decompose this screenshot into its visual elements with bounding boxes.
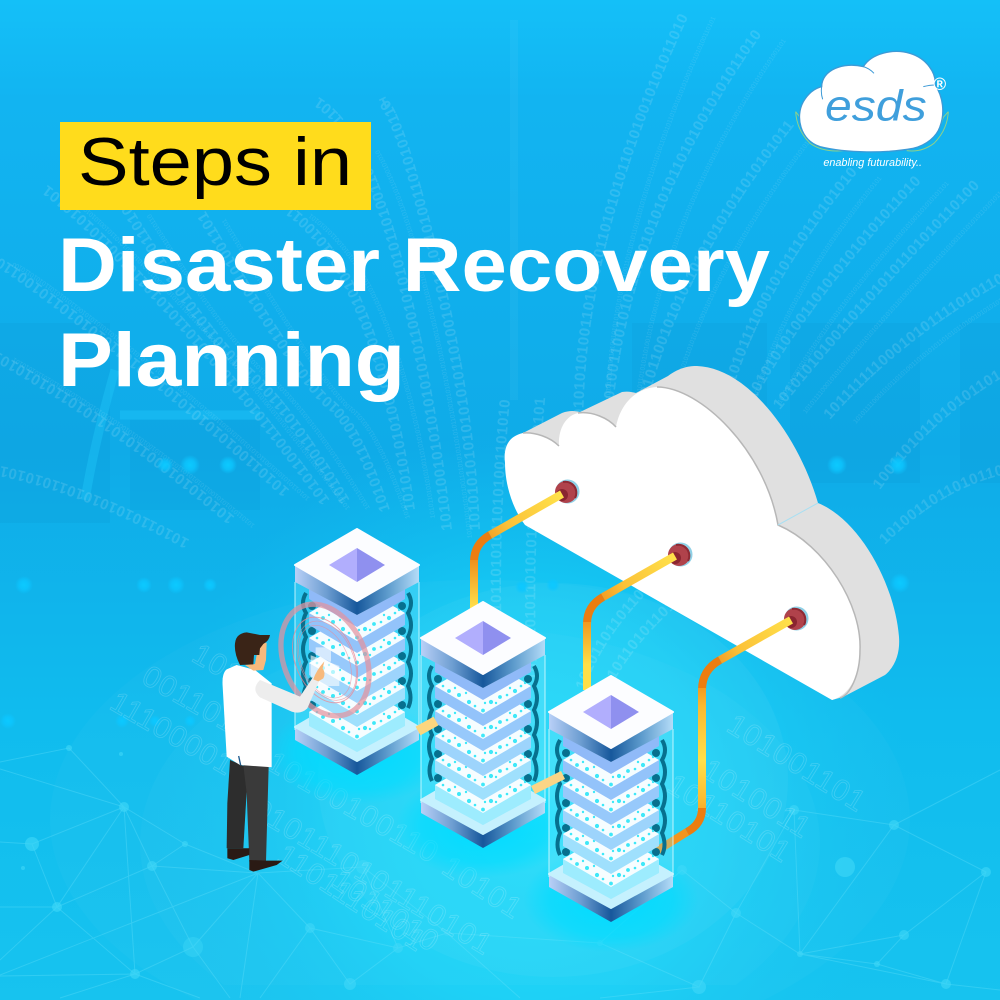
server tower 3 (523, 676, 699, 952)
cable link tower 2 to 3 (533, 775, 563, 790)
cable 3 (655, 620, 791, 852)
outlined binary digits on floor: 10100100110 (262, 745, 445, 870)
glow dots (0, 455, 910, 729)
background binary streams: 1011010110110101 (608, 605, 673, 678)
highlighted heading: Steps in (60, 122, 371, 210)
outlined binary digits on floor (104, 637, 872, 962)
background binary streams: 1010110110110101 (576, 590, 644, 687)
cloud front face (505, 387, 860, 700)
neck and face (245, 643, 267, 671)
logo inner arcs (821, 67, 935, 99)
network mesh (0, 745, 1000, 998)
outlined binary digits on floor: 10101 (436, 850, 528, 926)
coat (222, 665, 272, 767)
background binary streams: 101010101010101010110100101010101101001101010101101 (379, 96, 480, 530)
outlined binary digits on floor: 1101110101 (271, 838, 432, 959)
tagline: enabling futurability.. (823, 157, 922, 169)
title: Disaster Recovery Planning (58, 223, 770, 403)
trousers (227, 760, 247, 848)
arm (255, 677, 319, 713)
background binary streams: 1010110101010100110101010110101011010010101010010101010100110101010110101101010101001101 (13, 358, 254, 528)
background binary streams: 1010110101010100110101010110101011010010101010010101010100110101010110101101010101001101010101101010110100101010 (222, 218, 410, 518)
background binary streams: 1010110101010100110101010110101011010010101010010101010100110101010110101101010101001101010101101010110100101010 (376, 150, 472, 538)
outlined binary digits on floor: 101001101 (721, 708, 872, 819)
outlined binary digits on floor: 10110101 (661, 768, 797, 870)
background binary streams: 1010110101010100110101010110101011010010101010010101010100110101010110101101010101001101010101101010110100101010100101010101001101010101 (680, 140, 810, 369)
shoes (227, 848, 249, 860)
background binary streams: 101010010110110101011010100110101010110101 (490, 400, 510, 611)
background binary streams: 1010110101010100110101010110101011010010101010010101010100110101010110101101010101001101010101101010110100101010100101010101001101010101 (636, 40, 786, 392)
background binary streams: 101011010110101011010101001101010101101010 (524, 398, 545, 677)
cable 2 (587, 556, 675, 690)
outlined binary digits on floor: 111000010 (104, 685, 255, 791)
background binary streams: 1010111100010101101010011010101011010101101001010101010110101010011010101011010101101001010 (778, 182, 949, 404)
cable 1 (474, 494, 562, 612)
registered mark: ® (933, 74, 946, 94)
background binary streams: 1010110101010100110101010110101011010010101010010101010100110101010110101101010101001101010101101010110100101010100101010101001101010101 (606, 17, 716, 400)
background binary streams: 1010110101010100110101010110101011010010101010010101010100110101010110101101010101001101010101101010110100101010 (147, 214, 370, 510)
outlined binary digits on floor: 1011 (186, 637, 262, 700)
highlighted heading: Steps in: Steps in (78, 124, 352, 200)
logo cloud (799, 51, 943, 152)
background binary streams: 1010110101010100110101010110101011010010101010010101010100110101010110101101010101001101010101101010110100 (12, 263, 310, 500)
outlined binary digits on floor: 1010011 (696, 753, 817, 845)
hand (313, 661, 325, 681)
cloud (505, 366, 899, 700)
cable plugs (555, 480, 808, 630)
outlined binary digits on floor: 0101110101110101 (246, 793, 498, 962)
server tower 2 (395, 602, 571, 878)
cloud depth side (523, 366, 899, 700)
title: Disaster Recovery Planning: Disaster Recovery (58, 223, 770, 308)
outlined binary digits on floor: 001101 (136, 659, 243, 740)
title: Disaster Recovery Planning: Planning (58, 318, 405, 403)
logo: esds (796, 51, 948, 169)
logo hands (796, 112, 948, 151)
outlined binary digits on floor: 1011010 (326, 863, 445, 959)
background binary streams: 1010110101010100110101010110101011010010101010010101010100110101010110101101010101001101010101101010110100101010 (310, 214, 435, 518)
background binary streams: 1010111100010101101010011010101011010101101001010101010110101010011010101011010101101001010 (804, 192, 1000, 414)
holographic lock rings (264, 590, 386, 730)
logo wordmark: esds (825, 83, 927, 131)
server tower 1 (269, 529, 445, 805)
person (222, 632, 325, 872)
background binary streams: 1010111100010101101010011010101011010101101001010101010110101010011010101011010101101001010 (754, 177, 882, 396)
cable link tower 1 to 2 (418, 721, 436, 731)
background binary streams: 1010110101010100110101010110101011010010101010010101010100110101010110101101010101001101010101101010110100101010 (84, 210, 350, 510)
hair (235, 632, 270, 665)
